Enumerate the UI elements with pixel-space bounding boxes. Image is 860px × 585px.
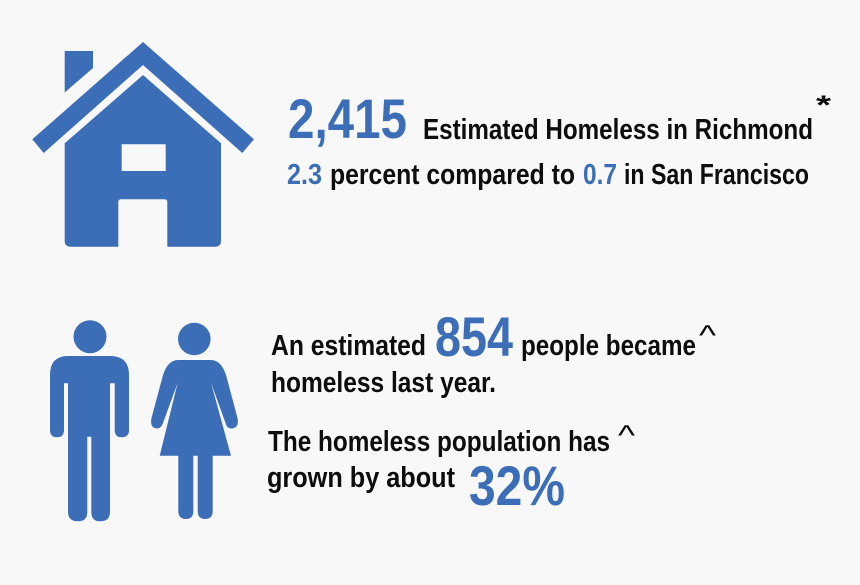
text: population growth: The homeless population has xyxy=(268,426,610,458)
text: people became homeless xyxy=(271,305,716,399)
text: population growth xyxy=(267,420,635,517)
comparison line: 0.7 xyxy=(583,159,617,191)
icon: woman xyxy=(151,323,238,519)
text: people became homeless: people became xyxy=(521,330,696,362)
text: people became homeless: homeless last year. xyxy=(271,367,496,399)
icon: man and woman xyxy=(50,320,238,521)
number: 854: 854 xyxy=(435,305,513,368)
comparison line xyxy=(287,159,809,191)
footnote mark: caret: ^ xyxy=(699,320,716,352)
comparison line: percent compared to xyxy=(330,159,575,191)
comparison line: 2.3 xyxy=(287,159,322,191)
text: population growth: grown by about xyxy=(267,462,455,494)
number: 32%: 32% xyxy=(469,454,565,517)
footnote mark: caret: ^ xyxy=(618,420,635,452)
footnote mark: asterisk: * xyxy=(816,90,832,120)
text: people became homeless: An estimated xyxy=(271,330,426,362)
headline: homeless count xyxy=(288,87,832,150)
comparison line: in San Francisco xyxy=(624,159,809,191)
icon: house xyxy=(32,42,254,247)
number: 2,415: 2,415 xyxy=(288,87,407,150)
icon: man xyxy=(50,320,129,521)
